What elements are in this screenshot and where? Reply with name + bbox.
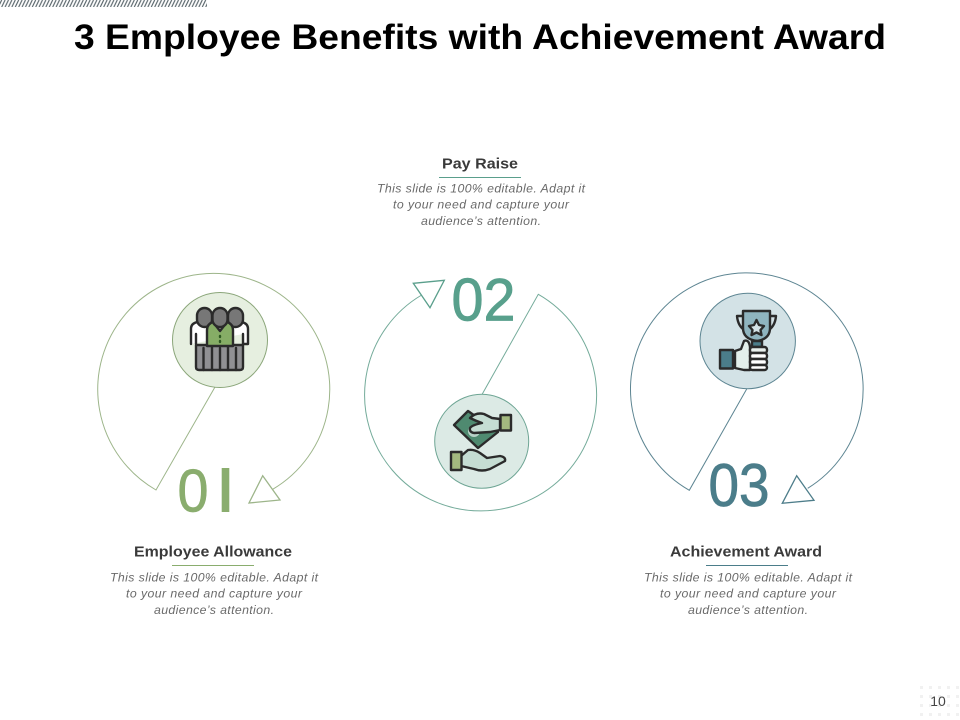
text block: pay raise: to your need and capture your <box>393 198 570 212</box>
arrow: 02 <box>413 280 444 308</box>
text block: pay raise: audience’s attention. <box>421 214 541 228</box>
panel: step 02 pay raise <box>365 266 597 511</box>
heading: employee allowance: Employee Allowance <box>134 544 292 560</box>
underline: achievement award <box>706 564 788 566</box>
icon: trophy in hand <box>720 311 776 370</box>
text block: achievement award: to your need and capture your <box>660 586 837 600</box>
page number: 10 <box>930 693 946 709</box>
text block: pay raise: This slide is 100% editable. Adapt it <box>377 182 586 196</box>
text block: employee allowance: to your need and capture your <box>126 586 303 600</box>
number: 01: 01 <box>178 458 240 524</box>
arc with pointer: 03 <box>631 273 863 490</box>
icon circle: 01 <box>172 292 268 388</box>
text block: achievement award: audience’s attention. <box>688 603 808 617</box>
panel: step 03 achievement award <box>631 273 863 617</box>
panel: step 01 employee allowance <box>98 273 330 617</box>
arrow: 01 <box>249 476 280 503</box>
text block: achievement award <box>644 570 853 617</box>
text block: employee allowance: audience’s attention. <box>154 603 274 617</box>
text block: pay raise <box>377 182 586 228</box>
text block: employee allowance <box>110 570 319 617</box>
heading: achievement award: Achievement Award <box>670 544 822 560</box>
underline: pay raise <box>439 176 521 178</box>
title: 3 Employee Benefits with Achievement Award <box>74 18 886 57</box>
panel: pay raise text <box>377 156 586 228</box>
arc with pointer: 01 <box>98 273 330 490</box>
icon circle: 02 <box>435 394 529 488</box>
icon circle: 03 <box>700 293 795 389</box>
dotted patch <box>914 680 960 720</box>
arrow: 03 <box>782 476 814 503</box>
icon: three employees <box>191 308 248 370</box>
page number panel <box>914 680 960 720</box>
underline: employee allowance <box>172 564 254 566</box>
text block: achievement award: This slide is 100% editable. Adapt it <box>644 570 853 584</box>
number: 01 <box>179 468 230 512</box>
number: 02: 02 <box>452 266 516 334</box>
top hatch strip <box>0 0 207 7</box>
text block: employee allowance: This slide is 100% editable. Adapt it <box>110 570 319 584</box>
number: 03: 03 <box>708 452 770 519</box>
icon: hands exchanging money <box>451 411 511 470</box>
heading: pay raise: Pay Raise <box>442 156 518 172</box>
arc with pointer: 02 <box>365 294 597 511</box>
